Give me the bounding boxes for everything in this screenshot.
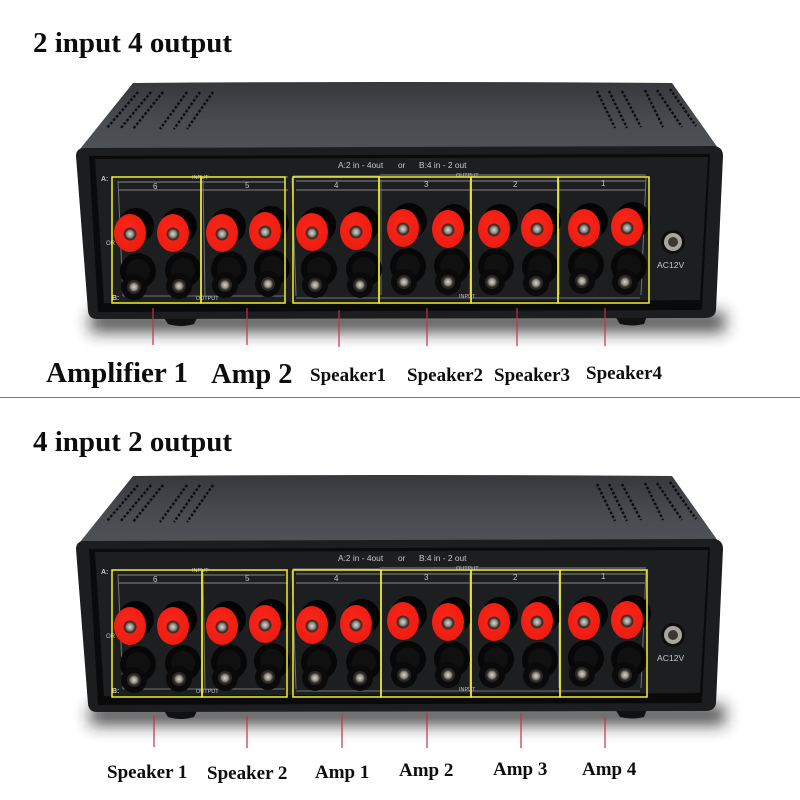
panel printed labels: 2 (513, 573, 518, 582)
panel printed labels: 4 (334, 574, 339, 583)
panel printed labels (101, 160, 684, 302)
yellow channel outlines (112, 177, 649, 303)
panel printed labels: 2 (513, 180, 518, 189)
panel printed labels: OUTPUT (456, 566, 479, 572)
panel printed labels: OR (106, 634, 116, 640)
panel printed labels: A: (101, 176, 108, 183)
panel printed labels: 3 (424, 573, 429, 582)
panel printed labels: AC12V (657, 653, 684, 663)
panel printed labels: B: (112, 688, 119, 695)
labels: bottom device: Speaker 2 (207, 763, 287, 784)
red pointer lines: bottom (154, 712, 605, 748)
panel printed labels: A:2 in - 4out (338, 160, 384, 170)
panel printed labels: 1 (601, 179, 606, 188)
labels: bottom device: Amp 2 (399, 760, 453, 781)
panel printed labels: AC12V (657, 260, 684, 270)
panel printed labels: B: (112, 295, 119, 302)
panel printed labels: INPUT (192, 568, 209, 574)
panel printed labels: INPUT (459, 687, 476, 693)
labels: top device: Speaker3 (494, 365, 570, 386)
device photo: 2 input 4 output (76, 82, 725, 332)
panel printed labels: 6 (153, 575, 158, 584)
panel printed labels: or (398, 553, 406, 563)
labels: bottom device: Amp 3 (493, 759, 547, 780)
panel printed labels: 1 (601, 572, 606, 581)
panel printed labels: 5 (245, 181, 250, 190)
panel printed labels: 5 (245, 574, 250, 583)
labels: top device (46, 357, 662, 390)
labels: top device: Amplifier 1 (46, 357, 188, 389)
panel printed labels (101, 553, 684, 695)
labels: top device: Speaker4 (586, 363, 662, 384)
panel printed labels: 6 (153, 182, 158, 191)
panel printed labels: OUTPUT (196, 689, 219, 695)
panel printed labels: 4 (334, 181, 339, 190)
panel printed labels: B:4 in - 2 out (419, 553, 467, 563)
panel printed labels: OUTPUT (456, 173, 479, 179)
red pointer lines: top (153, 308, 605, 347)
panel printed labels: B:4 in - 2 out (419, 160, 467, 170)
title: 2 input 4 output: 2 input 4 output (33, 27, 232, 59)
yellow channel outlines (112, 570, 647, 697)
panel printed labels: 3 (424, 180, 429, 189)
panel printed labels: INPUT (459, 294, 476, 300)
title: 4 input 2 output: 4 input 2 output (33, 426, 232, 458)
panel printed labels: OR (106, 241, 116, 247)
divider (0, 397, 800, 398)
panel printed labels: OUTPUT (196, 296, 219, 302)
labels: bottom device: Speaker 1 (107, 762, 187, 783)
labels: bottom device (107, 759, 637, 784)
labels: top device: Speaker1 (310, 365, 386, 386)
device photo: 4 input 2 output (76, 475, 725, 725)
panel printed labels: A: (101, 569, 108, 576)
labels: bottom device: Amp 1 (315, 762, 369, 783)
panel printed labels: or (398, 160, 406, 170)
labels: top device: Speaker2 (407, 365, 483, 386)
labels: top device: Amp 2 (211, 359, 293, 390)
panel printed labels: INPUT (192, 175, 209, 181)
labels: bottom device: Amp 4 (582, 759, 637, 780)
panel printed labels: A:2 in - 4out (338, 553, 384, 563)
